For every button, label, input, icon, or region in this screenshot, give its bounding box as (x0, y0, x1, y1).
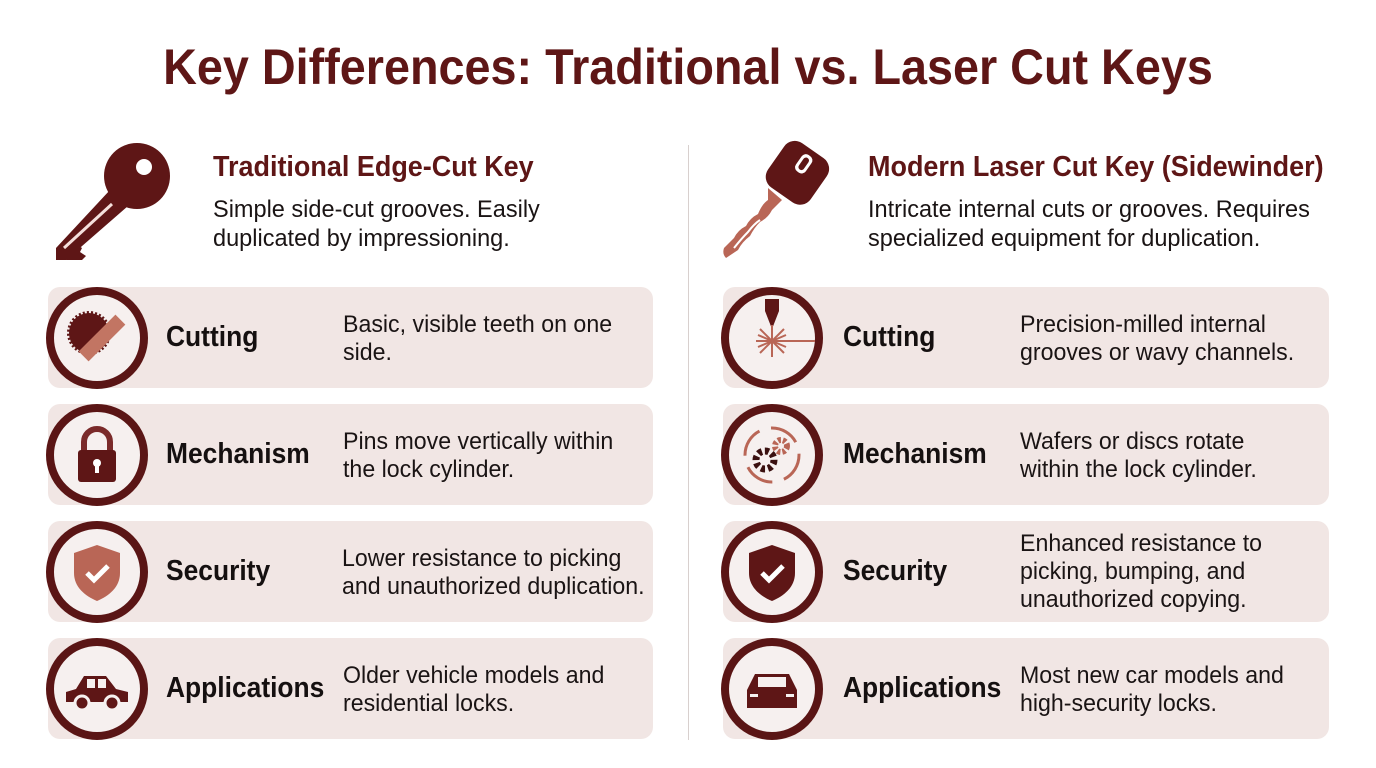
divider (688, 145, 689, 740)
description (343, 311, 612, 366)
description (1020, 428, 1257, 483)
row: traditional cutting (48, 287, 653, 388)
row: laser cutting (723, 287, 1329, 388)
row: traditional security (48, 521, 653, 622)
row: traditional applications (48, 638, 653, 739)
description: Pins move vertically within (343, 428, 613, 455)
description: within the lock cylinder. (1020, 456, 1257, 483)
icon: padlock (46, 404, 148, 506)
description (1020, 662, 1284, 717)
icon: gears (721, 404, 823, 506)
icon: traditional key (56, 143, 170, 260)
description: Lower resistance to picking (342, 545, 621, 572)
heading: traditional: Traditional Edge-Cut Key (213, 151, 534, 183)
description (343, 428, 613, 483)
panel: traditional (56, 143, 540, 260)
description: Wafers or discs rotate (1020, 428, 1244, 455)
label: Applications (166, 672, 324, 704)
label: Security (166, 555, 270, 587)
label: Cutting (166, 321, 258, 353)
description: grooves or wavy channels. (1020, 339, 1294, 366)
icon: modern car (721, 638, 823, 740)
description: Basic, visible teeth on one (343, 311, 612, 338)
label: Mechanism (843, 438, 987, 470)
icon: car (46, 638, 148, 740)
description (1020, 311, 1294, 366)
label: Security (843, 555, 947, 587)
description: side. (343, 339, 392, 366)
description: high-security locks. (1020, 690, 1217, 717)
row: laser security (723, 521, 1329, 622)
icon: laser key (723, 140, 830, 258)
description: residential locks. (343, 690, 514, 717)
panel: laser (723, 140, 1324, 258)
icon: saw (46, 287, 148, 389)
icon: shield dark (721, 521, 823, 623)
label: Mechanism (166, 438, 310, 470)
description (343, 662, 604, 717)
row: laser applications (723, 638, 1329, 739)
label: Cutting (843, 321, 935, 353)
icon: laser (721, 287, 823, 389)
description: Precision-milled internal (1020, 311, 1266, 338)
label: Applications (843, 672, 1001, 704)
description: Most new car models and (1020, 662, 1284, 689)
description: unauthorized copying. (1020, 586, 1247, 613)
text: laser description: specialized equipment for duplication. (868, 225, 1260, 252)
text: traditional description: duplicated by impressioning. (213, 225, 510, 252)
title: Key Differences: Traditional vs. Laser Cut Keys (163, 39, 1213, 95)
row: laser mechanism (723, 404, 1329, 505)
icon: shield (46, 521, 148, 623)
text: traditional description: Simple side-cut grooves. Easily (213, 196, 540, 223)
text: laser description (868, 196, 1310, 252)
description: Older vehicle models and (343, 662, 604, 689)
description: Enhanced resistance to (1020, 530, 1262, 557)
text: laser description: Intricate internal cuts or grooves. Requires (868, 196, 1310, 223)
description: the lock cylinder. (343, 456, 514, 483)
heading: laser: Modern Laser Cut Key (Sidewinder) (868, 151, 1324, 183)
description (342, 545, 645, 600)
description: picking, bumping, and (1020, 558, 1245, 585)
row: traditional mechanism (48, 404, 653, 505)
description: and unauthorized duplication. (342, 573, 645, 600)
description (1020, 530, 1262, 613)
text: traditional description (213, 196, 540, 252)
